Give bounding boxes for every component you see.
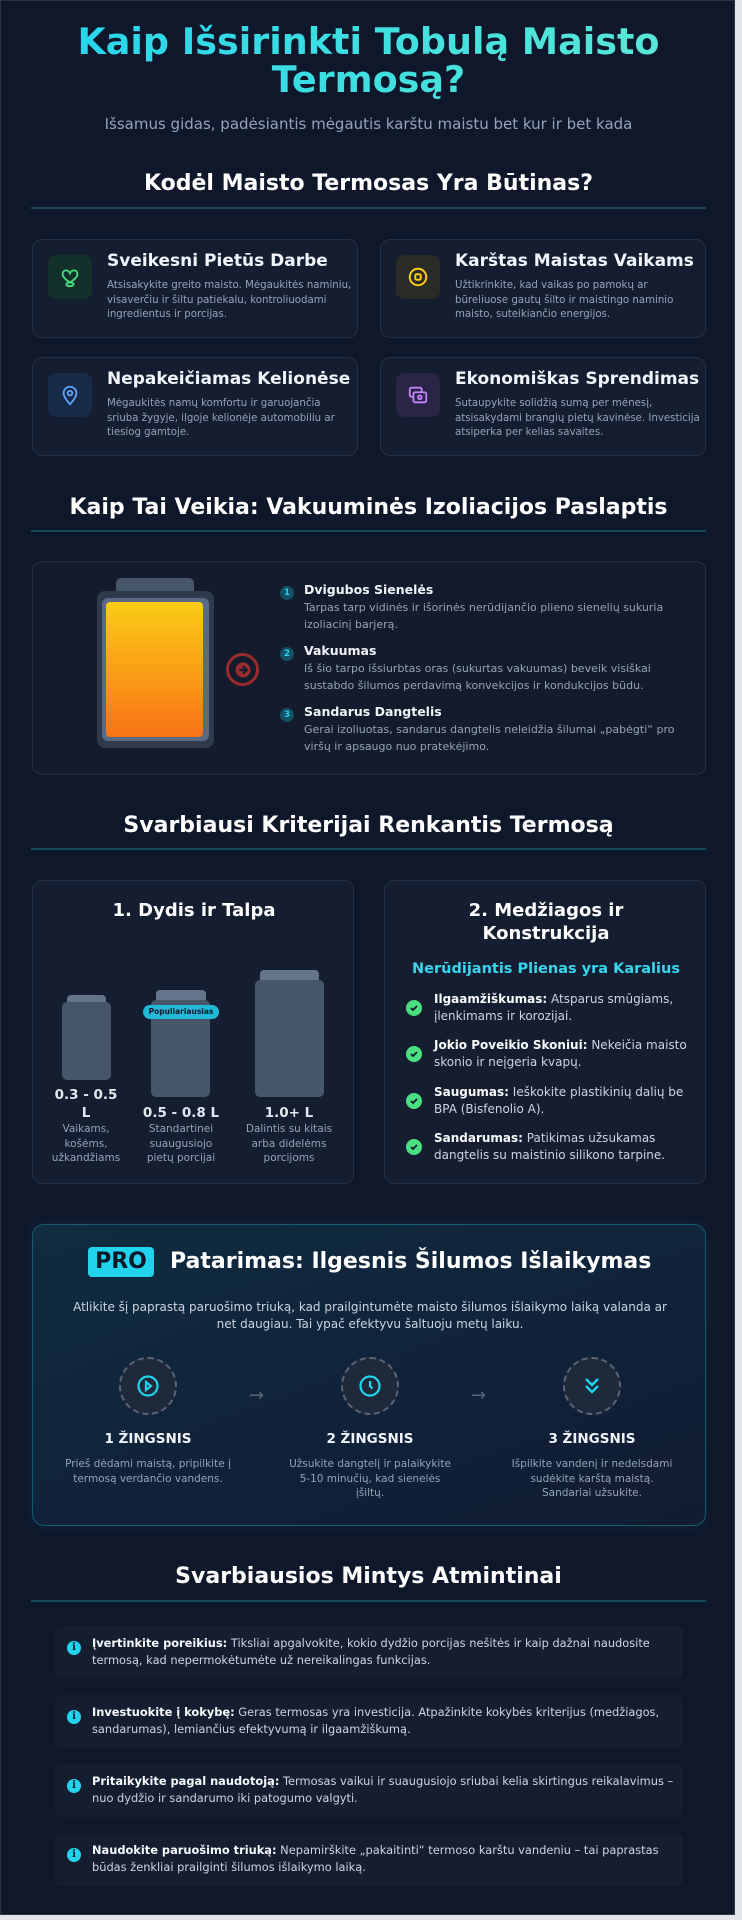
item taste <box>406 1038 687 1069</box>
item safety: BPA (Bisfenolio A). <box>434 1102 544 1116</box>
panel: size and capacity <box>32 880 354 1184</box>
label small: košėms, <box>64 1138 108 1150</box>
heading: criteria: Svarbiausi Kriterijai Renkantis Termosą <box>123 813 614 838</box>
panel: vacuum insulation <box>32 561 706 775</box>
panel: pro tip <box>32 1224 706 1526</box>
step 1: 1 ŽINGSNIS <box>104 1431 192 1447</box>
takeaway 4: būdas ženkliai prailginti šilumos išlaikymo laiką. <box>92 1860 366 1874</box>
icon: money <box>396 373 440 417</box>
panel: materials <box>384 880 706 1184</box>
bottle medium <box>143 990 219 1097</box>
label small: užkandžiams <box>52 1152 120 1164</box>
pro heading: Patarimas: Ilgesnis Šilumos Išlaikymas <box>170 1249 651 1274</box>
panel: card hot food for kids <box>380 239 706 338</box>
step 3: sudėkite karštą maistą. <box>530 1473 654 1485</box>
pro description: net daugiau. Tai ypač efektyvu šaltuoju metų laiku. <box>217 1317 523 1331</box>
step 3: 3 ŽINGSNIS <box>548 1431 636 1447</box>
arrow 2: → <box>471 1385 486 1406</box>
card text: maisto, suteikiančio energijos. <box>455 309 610 320</box>
item safety: Saugumas: Ieškokite plastikinių dalių be <box>434 1085 683 1099</box>
label large: 1.0+ L <box>265 1105 313 1121</box>
badge popular: Populiariausias <box>149 1007 213 1016</box>
label large: porcijoms <box>264 1152 314 1164</box>
item safety <box>406 1085 683 1116</box>
takeaway 2: sandarumas), lemiančius efektyvumą ir ilgaamžiškumą. <box>92 1722 411 1736</box>
icon: red arrow <box>226 653 259 686</box>
panel: card economical <box>380 357 706 456</box>
takeaway 1 <box>55 1626 683 1679</box>
icon: thermos diagram <box>97 578 214 748</box>
card title: Ekonomiškas Sprendimas <box>455 369 699 389</box>
step 1 <box>280 582 663 631</box>
panel title: 1. Dydis ir Talpa <box>113 900 275 921</box>
step 3: 3 <box>284 710 290 720</box>
card text: atsiperka per kelias savaites. <box>455 427 603 438</box>
takeaway 3 <box>55 1764 683 1817</box>
step 3: Išpilkite vandenį ir nedelsdami <box>512 1458 672 1470</box>
label medium <box>143 1105 219 1164</box>
heading: why: Kodėl Maisto Termosas Yra Būtinas? <box>144 171 593 196</box>
step 1: Dvigubos Sienelės <box>304 582 433 597</box>
label small: Vaikams, <box>62 1123 110 1135</box>
item durability: įlenkimams ir korozijai. <box>434 1009 572 1023</box>
takeaway 2: Investuokite į kokybę: Geras termosas yra investicija. Atpažinkite kokybės kriterijus (medžiagos, <box>92 1705 659 1719</box>
card text: Užtikrinkite, kad vaikas po pamokų ar <box>455 280 648 291</box>
arrow 1: → <box>249 1385 264 1406</box>
pro description: Atlikite šį paprastą paruošimo triuką, kad prailgintumėte maisto šilumos išlaikymo laiką valanda ar <box>73 1300 667 1314</box>
item seal <box>406 1131 665 1162</box>
step 2: Iš šio tarpo išsiurbtas oras (sukurtas vakuumas) beveik visiškai <box>304 662 651 675</box>
label large: Dalintis su kitais <box>246 1123 332 1135</box>
card text <box>455 280 673 320</box>
item durability: Ilgaamžiškumas: Atsparus smūgiams, <box>434 992 673 1006</box>
card text <box>107 397 335 438</box>
step 2: 5-10 minučių, kad sienelės <box>300 1473 440 1485</box>
takeaway 4: Naudokite paruošimo triuką: Nepamirškite „pakaitinti“ termoso karštu vandeniu – tai paprastas <box>92 1843 659 1857</box>
step 1: Prieš dėdami maistą, pripilkite į <box>65 1458 231 1470</box>
pro description <box>73 1300 667 1331</box>
label medium: Standartinei <box>149 1123 213 1135</box>
badge popular <box>143 1005 219 1019</box>
step 3: Gerai izoliuotas, sandarus dangtelis neleidžia šilumai „pabėgti“ pro <box>304 723 674 736</box>
label small <box>52 1087 120 1164</box>
card text: tiesiog gamtoje. <box>107 427 189 438</box>
takeaway 4: i <box>72 1849 76 1860</box>
bottle small <box>62 995 111 1080</box>
card text: Atsisakykite greito maisto. Mėgaukitės naminiu, <box>107 280 351 291</box>
label medium: suaugusiojo <box>150 1138 212 1150</box>
step 2: įšiltų. <box>356 1487 384 1499</box>
card text: visaverčiu ir šiltu patiekalu, kontroliuodami <box>107 295 326 306</box>
step 1: Tarpas tarp vidinės ir išorinės nerūdijančio plieno sienelių sukuria <box>304 601 663 614</box>
takeaway 3: i <box>72 1780 76 1791</box>
step 1 <box>65 1357 231 1485</box>
step 2 <box>289 1357 451 1499</box>
icon: location pin <box>48 373 92 417</box>
takeaway 1: termosą, kad nepermokėtumėte už nereikalingas funkcijas. <box>92 1653 430 1667</box>
label medium: pietų porcijai <box>147 1152 215 1164</box>
label medium: 0.5 - 0.8 L <box>143 1105 219 1121</box>
panel title: 2. Medžiagos ir <box>469 900 623 921</box>
card text <box>455 398 700 438</box>
card title: Sveikesni Pietūs Darbe <box>107 251 328 271</box>
panel title: Konstrukcija <box>483 923 609 944</box>
label large: arba didelėms <box>252 1138 326 1150</box>
step 3 <box>512 1357 672 1499</box>
title: Kaip Išsirinkti Tobulą Maisto <box>77 20 660 63</box>
card title: Nepakeičiamas Kelionėse <box>107 369 350 389</box>
panel title <box>469 900 624 944</box>
pro heading: PRO <box>95 1249 147 1274</box>
item taste: Jokio Poveikio Skoniui: Nekeičia maisto <box>434 1038 687 1052</box>
heading: how it works: Kaip Tai Veikia: Vakuuminės Izoliacijos Paslaptis <box>69 495 668 520</box>
step 3: Sandariai užsukite. <box>542 1487 642 1499</box>
item seal: Sandarumas: Patikimas užsukamas <box>434 1131 655 1145</box>
item taste: skonio ir neįgeria kvapų. <box>434 1055 582 1069</box>
step 2: 2 ŽINGSNIS <box>326 1431 414 1447</box>
icon: heart <box>48 255 92 299</box>
label small: 0.3 - 0.5 <box>55 1087 117 1103</box>
card text <box>107 280 351 320</box>
step 2 <box>280 643 651 692</box>
step 3: viršų ir apsaugo nuo pratekėjimo. <box>304 740 489 753</box>
takeaway 1: i <box>72 1642 76 1653</box>
label large <box>246 1105 332 1164</box>
card text: ingredientus ir porcijas. <box>107 309 227 320</box>
step 2: Vakuumas <box>304 643 376 658</box>
panel: card travel <box>32 357 358 456</box>
panel: card healthier lunch <box>32 239 358 338</box>
step 2: Užsukite dangtelį ir palaikykite <box>289 1458 451 1470</box>
title: Termosą? <box>272 58 465 101</box>
card title: Karštas Maistas Vaikams <box>455 251 694 271</box>
takeaway 3: Pritaikykite pagal naudotoją: Termosas vaikui ir suaugusiojo sriubai kelia skirtingus reikalavimus – <box>92 1774 673 1788</box>
icon: clock <box>341 1357 399 1415</box>
subtitle: Išsamus gidas, padėsiantis mėgautis karštu maistu bet kur ir bet kada <box>105 115 632 133</box>
card text: atsisakydami brangių pietų kavinėse. Investicija <box>455 413 700 424</box>
heading: key takeaways: Svarbiausios Mintys Atmintinai <box>175 1564 562 1589</box>
takeaway 1: Įvertinkite poreikius: Tiksliai apgalvokite, kokio dydžio porcijas nešitės ir kaip dažnai naudosite <box>92 1636 650 1650</box>
item durability <box>406 992 673 1023</box>
step 3 <box>280 704 674 753</box>
card text: sriuba žygyje, ilgoje kelionėje automobiliu ar <box>107 413 335 424</box>
title <box>1 23 736 99</box>
icon: play <box>119 1357 177 1415</box>
item seal: dangtelis su maistinio silikono tarpine. <box>434 1148 665 1162</box>
card text: būreliuose gautų šilto ir maistingo naminio <box>455 295 673 306</box>
step 3: Sandarus Dangtelis <box>304 704 442 719</box>
subtitle cyan: Nerūdijantis Plienas yra Karalius <box>412 961 680 977</box>
icon: coin <box>396 255 440 299</box>
icon: double chevron <box>563 1357 621 1415</box>
step 1: termosą verdančio vandens. <box>73 1473 223 1485</box>
step 2: 2 <box>284 649 290 659</box>
step 2: sustabdo šilumos perdavimą konvekcijos ir kondukcijos būdu. <box>304 679 644 692</box>
takeaway 2 <box>55 1695 683 1748</box>
card text: Sutaupykite solidžią sumą per mėnesį, <box>455 398 652 409</box>
takeaway 3: nuo dydžio ir sandarumo iki patogumo valgyti. <box>92 1791 358 1805</box>
step 1: izoliacinį barjerą. <box>304 618 398 631</box>
card text: Mėgaukitės namų komfortu ir garuojančia <box>107 398 321 409</box>
takeaway 2: i <box>72 1711 76 1722</box>
step 1: 1 <box>284 588 290 598</box>
bottle large <box>255 970 324 1097</box>
label small: L <box>82 1105 90 1121</box>
takeaway 4 <box>55 1833 683 1886</box>
